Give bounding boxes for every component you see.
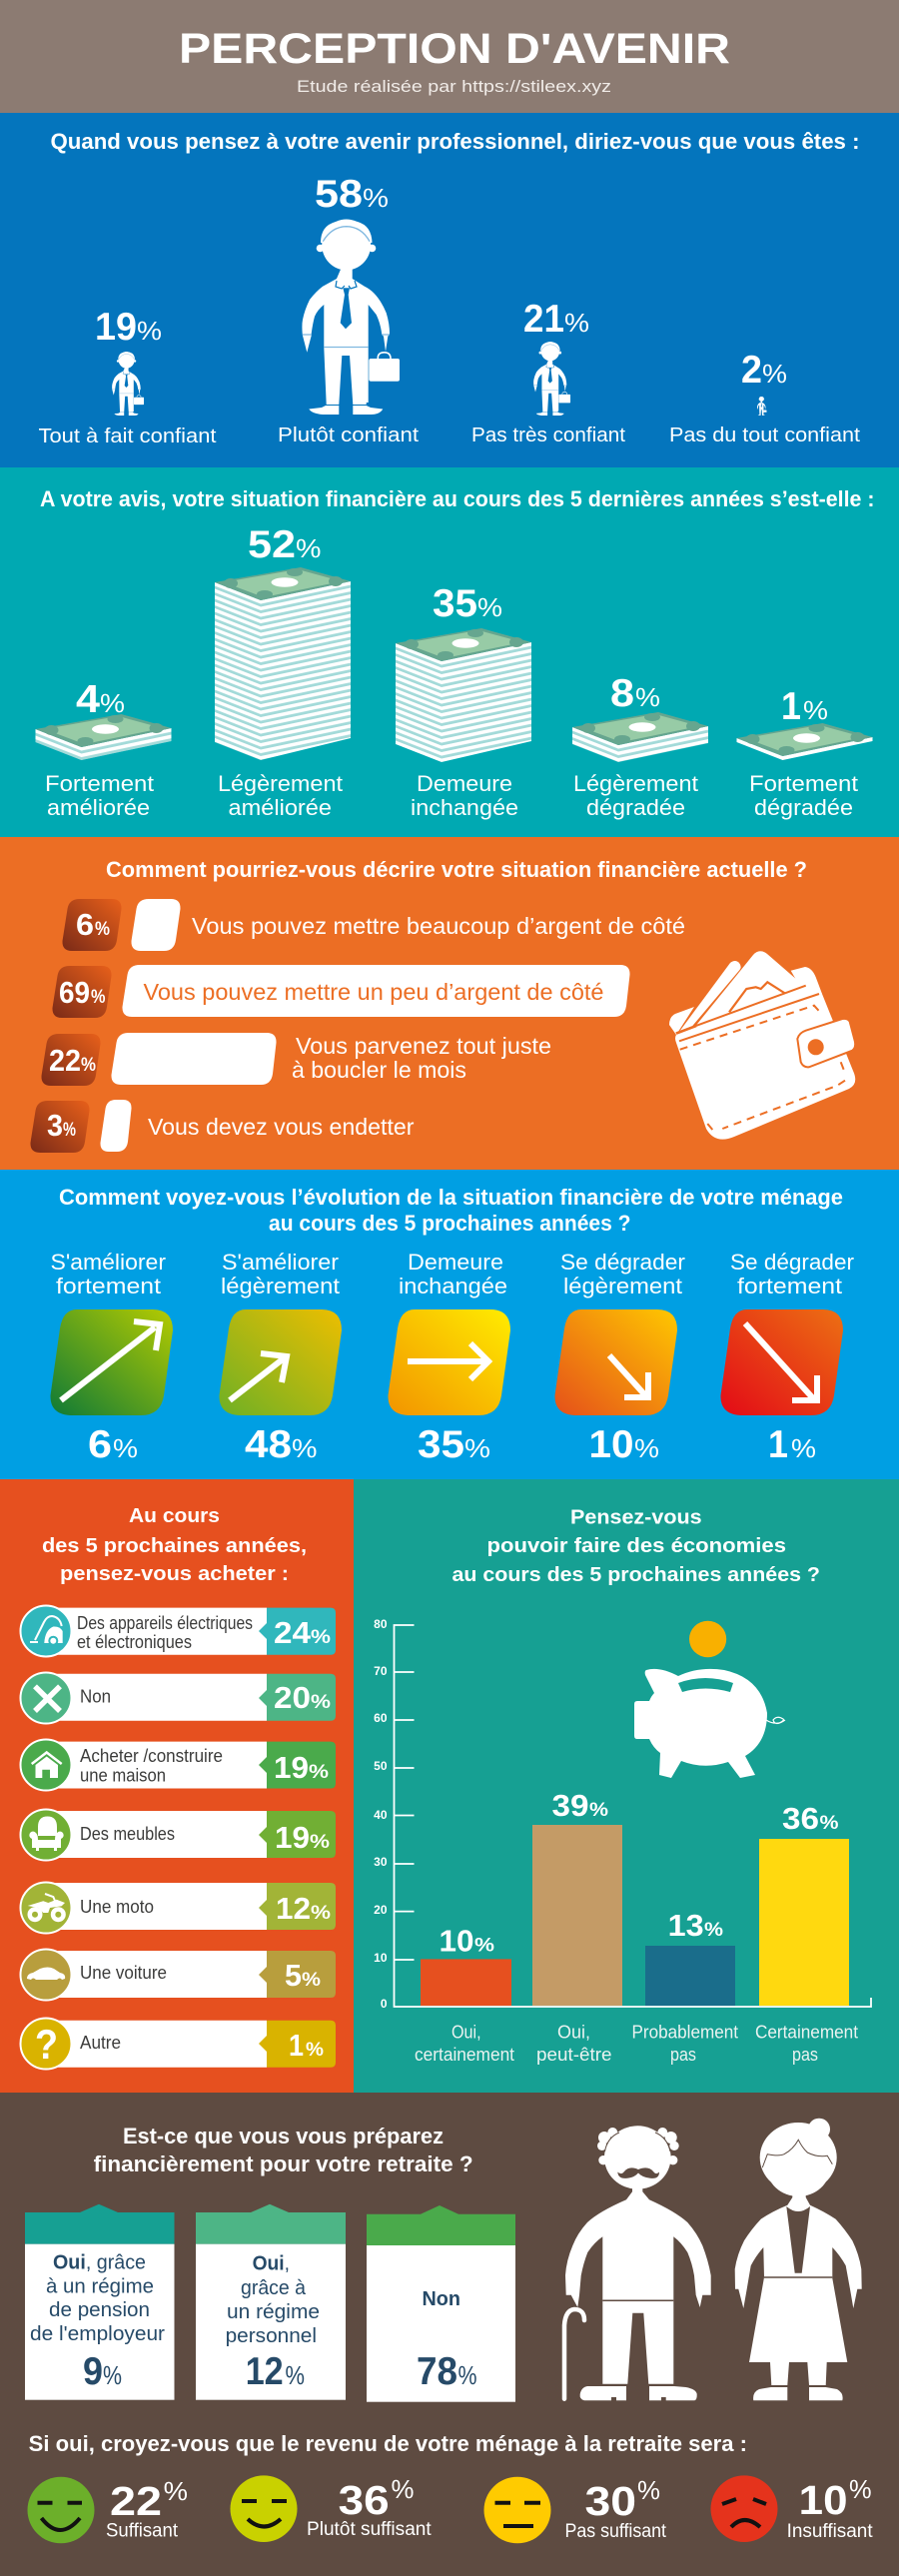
face: not sufficient 30% xyxy=(483,2475,667,2543)
label: inchangée xyxy=(399,1274,507,1298)
panel: retirement xyxy=(0,2093,899,2576)
chart: savings bars: 13 xyxy=(668,1908,704,1943)
card: no 78%: Non xyxy=(422,2288,460,2310)
row: house 19%: % xyxy=(309,1762,329,1783)
value 58%: 58 xyxy=(315,173,363,216)
label xyxy=(730,1250,854,1298)
heading: Comment voyez-vous l’évolution de la situation financière de votre ménage xyxy=(59,1185,843,1210)
label: fortement xyxy=(56,1274,161,1298)
value 1% xyxy=(781,685,828,728)
face: sufficient 22% xyxy=(28,2476,188,2543)
row: motorbike 12% xyxy=(20,1882,336,1934)
icon: businessman tiny 2% xyxy=(757,397,767,416)
chart: savings bars: certainement xyxy=(415,2045,514,2065)
card: employer pension 9%: Oui, grâce xyxy=(53,2252,146,2274)
row: 6%: 6 xyxy=(76,907,94,942)
label: légèrement xyxy=(221,1274,340,1298)
heading: des 5 prochaines années, xyxy=(42,1534,307,1557)
value 1%: % xyxy=(791,1433,816,1463)
value 52% xyxy=(248,523,322,566)
chart: savings bars: 80 xyxy=(374,1617,388,1631)
panel: professional outlook xyxy=(0,113,899,467)
row: appliances 24% xyxy=(20,1606,336,1656)
label: Demeure xyxy=(408,1250,503,1275)
label: Légèrement xyxy=(218,771,343,796)
value 52%: 52 xyxy=(248,523,296,566)
chart: savings bars: 0 xyxy=(381,1997,388,2011)
icon: elderly woman xyxy=(735,2119,862,2400)
label: Pas du tout confiant xyxy=(669,425,860,446)
subheading: Si oui, croyez-vous que le revenu de votre ménage à la retraite sera : xyxy=(29,2431,747,2456)
row: 69%: Vous pouvez mettre un peu d’argent de côté xyxy=(144,979,603,1005)
row: motorbike 12%: % xyxy=(311,1903,331,1924)
tile: strong improvement arrow xyxy=(50,1309,173,1415)
row: no 20% xyxy=(20,1672,336,1724)
card: personal plan 12%: Oui, xyxy=(253,2253,290,2275)
row: 3% xyxy=(30,1100,415,1153)
subtitle: Etude réalisée par https://stileex.xyz xyxy=(297,78,611,96)
icon: money stack 35% xyxy=(396,628,531,762)
card: personal plan 12%: 12 xyxy=(246,2350,284,2393)
value 6%: 6 xyxy=(88,1423,112,1466)
chart: savings bars xyxy=(374,1617,871,2065)
chart: savings bars: Certainement xyxy=(755,2022,858,2042)
label xyxy=(45,771,154,820)
card: no 78%: 78 xyxy=(417,2350,457,2393)
value 35% xyxy=(418,1423,490,1466)
row: 69%: % xyxy=(91,987,106,1008)
tile: unchanged arrow xyxy=(388,1309,510,1415)
value 19% xyxy=(95,306,162,349)
label xyxy=(749,771,858,820)
panel: current financial situation xyxy=(0,837,899,1170)
card: personal plan 12%: personnel xyxy=(226,2325,317,2347)
row: house 19%: une maison xyxy=(80,1766,166,1786)
heading: financièrement pour votre retraite ? xyxy=(94,2151,473,2176)
row: 22%: 22 xyxy=(49,1043,81,1078)
chart: savings bars: 39 xyxy=(551,1788,589,1823)
value 19%: 19 xyxy=(95,306,137,349)
value 35%: % xyxy=(477,592,502,622)
chart: savings bars: Oui, xyxy=(451,2022,481,2042)
card: personal plan 12%: un régime xyxy=(227,2301,320,2323)
row: 6% xyxy=(62,899,685,951)
panel: future evolution xyxy=(0,1170,899,1479)
card: employer pension 9%: % xyxy=(103,2360,122,2390)
value 52%: % xyxy=(296,533,322,563)
chart: savings bars: % xyxy=(589,1800,608,1821)
card: employer pension 9% xyxy=(25,2204,174,2400)
value 10%: % xyxy=(634,1433,659,1463)
row: motorbike 12%: Une moto xyxy=(80,1897,154,1917)
value 1%: 1 xyxy=(781,685,801,728)
label: inchangée xyxy=(411,795,518,820)
label: Plutôt confiant xyxy=(278,425,419,446)
value 21%: % xyxy=(564,308,589,338)
row: furniture 19%: Des meubles xyxy=(80,1824,175,1844)
value 48% xyxy=(245,1423,318,1466)
label: S'améliorer xyxy=(50,1250,166,1275)
row: other 1%: 1 xyxy=(289,2028,304,2063)
label xyxy=(399,1250,507,1298)
icon: money stack 1% xyxy=(737,723,873,760)
value 4%: 4 xyxy=(76,678,100,721)
heading: A votre avis, votre situation financière au cours des 5 dernières années s’est-elle : xyxy=(40,486,875,511)
face: not sufficient 30%: % xyxy=(637,2475,660,2505)
chart: savings bars: % xyxy=(704,1920,723,1941)
row: furniture 19% xyxy=(20,1810,336,1860)
value 8%: 8 xyxy=(610,672,634,715)
value 2%: 2 xyxy=(741,349,762,392)
heading: pouvoir faire des économies xyxy=(487,1534,786,1557)
chart: savings bars: 36 xyxy=(782,1801,819,1836)
face: sufficient 22%: 22 xyxy=(110,2478,162,2524)
value 35%: 35 xyxy=(433,582,477,625)
icon: coin xyxy=(689,1621,726,1657)
label: légèrement xyxy=(563,1274,682,1298)
label: fortement xyxy=(737,1274,842,1298)
panel: past financial situation xyxy=(0,467,899,837)
chart: savings bars: Probablement xyxy=(631,2022,738,2042)
row: appliances 24%: Des appareils électriques xyxy=(77,1613,253,1633)
chart: savings bars: 40 xyxy=(374,1808,388,1822)
face: insufficient 10% xyxy=(711,2474,873,2542)
title: PERCEPTION D'AVENIR xyxy=(179,25,730,73)
label: Tout à fait confiant xyxy=(38,426,217,447)
row: no 20%: % xyxy=(311,1692,331,1713)
chart: savings bars: 10 xyxy=(374,1951,388,1965)
row: other 1% xyxy=(20,2018,336,2070)
heading: au cours des 5 prochaines années ? xyxy=(269,1211,631,1236)
value 1%: 1 xyxy=(768,1423,788,1466)
value 35%: % xyxy=(464,1433,490,1463)
face: sufficient 22%: Suffisant xyxy=(106,2520,179,2541)
value 1% xyxy=(768,1423,816,1466)
value 6% xyxy=(88,1423,138,1466)
card: no 78%: % xyxy=(457,2360,477,2390)
row: 3%: % xyxy=(63,1120,76,1141)
heading: au cours des 5 prochaines années ? xyxy=(451,1563,820,1586)
face: rather sufficient 36%: % xyxy=(392,2474,414,2504)
face: rather sufficient 36%: 36 xyxy=(339,2477,390,2523)
tile: slight improvement arrow xyxy=(219,1309,342,1415)
value 2%: % xyxy=(762,359,787,389)
label: Fortement xyxy=(749,771,858,796)
face: insufficient 10%: 10 xyxy=(799,2477,847,2523)
row: car 5%: Une voiture xyxy=(80,1963,167,1983)
row: motorbike 12%: 12 xyxy=(276,1891,311,1926)
card: employer pension 9%: de l'employeur xyxy=(30,2323,165,2345)
label: dégradée xyxy=(586,795,685,820)
chart: savings bars: peut-être xyxy=(536,2045,611,2065)
row: other 1%: ? xyxy=(35,2021,58,2068)
icon: money stack 4% xyxy=(36,714,172,760)
label: Demeure xyxy=(417,771,512,796)
face: rather sufficient 36% xyxy=(230,2474,432,2542)
label: Pas très confiant xyxy=(471,425,625,446)
label: Légèrement xyxy=(573,771,698,796)
face: insufficient 10%: Insuffisant xyxy=(787,2521,873,2542)
label xyxy=(50,1250,166,1298)
panel: header xyxy=(0,0,899,113)
chart: savings bars: % xyxy=(819,1813,839,1834)
label: améliorée xyxy=(47,795,150,820)
face: sufficient 22%: % xyxy=(164,2476,188,2506)
label: S'améliorer xyxy=(222,1250,339,1275)
face: not sufficient 30%: 30 xyxy=(585,2478,636,2524)
value 48%: 48 xyxy=(245,1423,292,1466)
heading: Est-ce que vous vous préparez xyxy=(123,2124,444,2148)
row: 22% xyxy=(41,1033,551,1086)
row: car 5%: 5 xyxy=(285,1958,302,1993)
heading xyxy=(59,1185,843,1236)
card: employer pension 9%: à un régime xyxy=(46,2276,154,2298)
row: furniture 19%: 19 xyxy=(275,1820,310,1855)
panel: planned purchases xyxy=(0,1479,354,2093)
face: not sufficient 30%: Pas suffisant xyxy=(565,2521,667,2542)
label: Se dégrader xyxy=(730,1250,854,1275)
chart: savings bars: 50 xyxy=(374,1759,388,1773)
row: 22%: Vous parvenez tout juste xyxy=(296,1033,551,1059)
label: améliorée xyxy=(228,795,332,820)
value 58%: % xyxy=(363,183,389,213)
icon: elderly man with cane xyxy=(564,2126,711,2400)
card: personal plan 12%: grâce à xyxy=(241,2277,307,2299)
row: furniture 19%: % xyxy=(310,1832,330,1853)
value 21%: 21 xyxy=(523,298,564,341)
value 8% xyxy=(610,672,660,715)
row: car 5% xyxy=(20,1950,336,2000)
card: no 78% xyxy=(367,2205,515,2402)
card: employer pension 9%: 9 xyxy=(83,2350,103,2393)
tile: slight decline arrow xyxy=(554,1309,677,1415)
chart: savings bars: 60 xyxy=(374,1711,388,1725)
icon: businessman small 19% xyxy=(112,352,144,416)
row: car 5%: % xyxy=(302,1970,321,1991)
value 4% xyxy=(76,678,125,721)
card: personal plan 12% xyxy=(196,2204,346,2400)
value 4%: % xyxy=(100,688,125,718)
tile: strong decline arrow xyxy=(720,1309,843,1415)
row: house 19% xyxy=(20,1740,336,1790)
heading: Quand vous pensez à votre avenir professionnel, diriez-vous que vous êtes : xyxy=(50,129,859,154)
value 10%: 10 xyxy=(589,1423,633,1466)
heading: Pensez-vous xyxy=(570,1506,702,1528)
icon: businessman large 58% xyxy=(302,220,400,415)
value 19%: % xyxy=(137,316,162,346)
face: rather sufficient 36%: Plutôt suffisant xyxy=(307,2519,432,2540)
chart: savings bars: % xyxy=(474,1936,494,1956)
chart: savings bars: 20 xyxy=(374,1903,388,1917)
icon: money stack 52% xyxy=(215,567,351,760)
heading xyxy=(451,1506,820,1586)
value 35% xyxy=(433,582,502,625)
row: no 20%: 20 xyxy=(274,1680,311,1715)
heading: pensez-vous acheter : xyxy=(60,1562,289,1585)
chart: savings bars: 10 xyxy=(440,1924,473,1958)
heading: Comment pourriez-vous décrire votre situation financière actuelle ? xyxy=(106,857,807,882)
value 6%: % xyxy=(113,1433,138,1463)
card: employer pension 9%: de pension xyxy=(49,2299,150,2321)
value 2% xyxy=(741,349,787,392)
face: insufficient 10%: % xyxy=(849,2474,872,2504)
icon: money stack 8% xyxy=(572,712,708,762)
value 8%: % xyxy=(635,682,660,712)
value 1%: % xyxy=(803,695,828,725)
row: 3%: 3 xyxy=(47,1108,63,1143)
label xyxy=(411,771,518,820)
row: 3%: Vous devez vous endetter xyxy=(148,1114,415,1140)
chart: savings bars: Oui, xyxy=(557,2022,590,2042)
row: appliances 24%: 24 xyxy=(274,1615,312,1650)
label xyxy=(218,771,343,820)
row: 69% xyxy=(52,965,630,1018)
heading xyxy=(42,1504,307,1585)
row: no 20%: Non xyxy=(80,1686,111,1706)
icon: businessman medium 21% xyxy=(533,342,570,416)
row: appliances 24%: et électroniques xyxy=(77,1632,192,1652)
value 58% xyxy=(315,173,389,216)
label xyxy=(573,771,698,820)
row: other 1%: Autre xyxy=(80,2033,121,2053)
icon: piggy bank xyxy=(634,1669,785,1778)
row: 22%: % xyxy=(81,1055,96,1076)
row: 6%: Vous pouvez mettre beaucoup d’argent de côté xyxy=(192,913,685,939)
value 48%: % xyxy=(292,1433,318,1463)
label xyxy=(221,1250,340,1298)
value 10% xyxy=(589,1423,659,1466)
row: house 19%: 19 xyxy=(274,1750,309,1785)
label xyxy=(560,1250,685,1298)
heading xyxy=(94,2124,473,2176)
heading: Au cours xyxy=(129,1504,220,1527)
icon: wallet xyxy=(669,951,855,1140)
value 21% xyxy=(523,298,589,341)
row: house 19%: Acheter /construire xyxy=(80,1746,223,1766)
row: 6%: % xyxy=(95,919,110,940)
label: Fortement xyxy=(45,771,154,796)
row: 69%: 69 xyxy=(59,975,90,1010)
value 35%: 35 xyxy=(418,1423,464,1466)
panel: savings xyxy=(354,1479,899,2093)
label: dégradée xyxy=(754,795,853,820)
label: Se dégrader xyxy=(560,1250,685,1275)
chart: savings bars: 70 xyxy=(374,1664,388,1678)
card: personal plan 12%: % xyxy=(286,2360,305,2390)
chart: savings bars: 30 xyxy=(374,1855,388,1869)
chart: savings bars: pas xyxy=(670,2045,696,2065)
row: appliances 24%: % xyxy=(311,1627,331,1648)
row: 22%: à boucler le mois xyxy=(292,1057,466,1083)
row: other 1%: % xyxy=(306,2040,324,2061)
chart: savings bars: pas xyxy=(792,2045,818,2065)
